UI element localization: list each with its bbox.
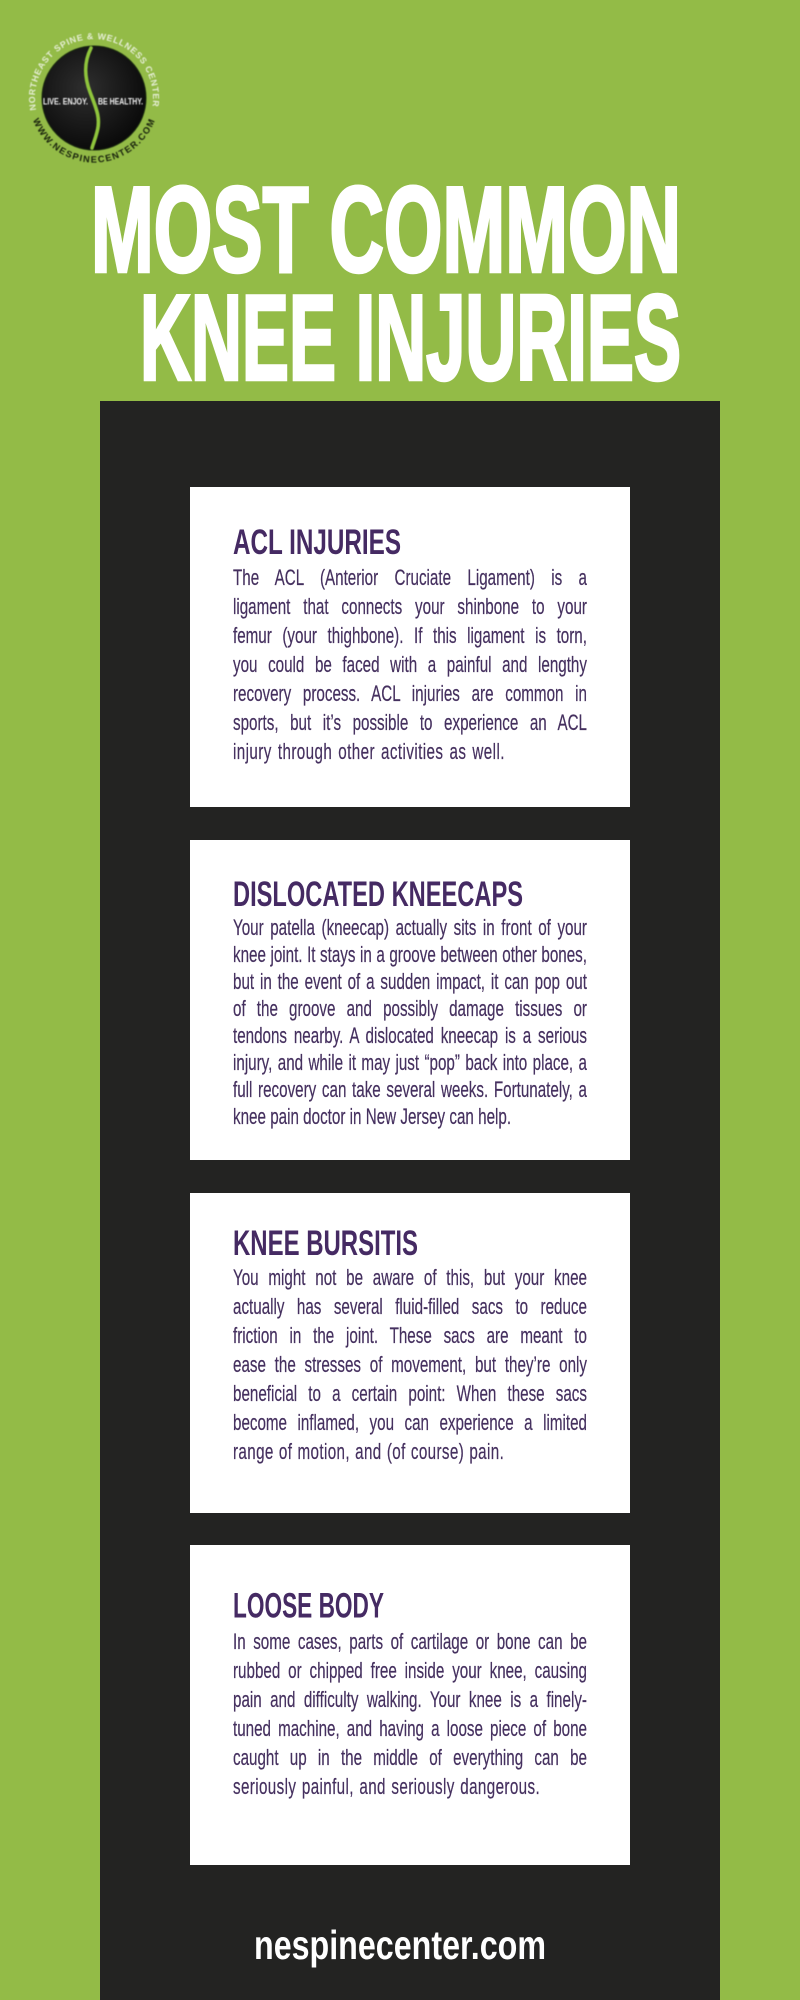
logo ring text top: NORTHEAST SPINE & WELLNESS CENTER <box>28 32 160 111</box>
text: loose body: In some cases, parts of cartilage or bone can be <box>233 1629 587 1654</box>
logo spine <box>86 48 98 148</box>
card: loose body <box>190 1545 630 1864</box>
text: loose body: rubbed or chipped free inside your knee, causing <box>233 1658 587 1683</box>
logo slogan <box>43 96 143 106</box>
text: knee bursitis: actually has several fluid-filled sacs to reduce <box>233 1294 587 1319</box>
text: knee bursitis: beneficial to a certain point: When these sacs <box>233 1381 587 1406</box>
title <box>91 162 681 400</box>
text: dislocated kneecaps: full recovery can take several weeks. Fortunately, a <box>233 1077 587 1102</box>
text: dislocated kneecaps: tendons nearby. A dislocated kneecap is a serious <box>233 1023 587 1048</box>
heading: knee bursitis: KNEE BURSITIS <box>233 1223 418 1262</box>
text: knee bursitis: friction in the joint. These sacs are meant to <box>233 1323 587 1348</box>
text: dislocated kneecaps: of the groove and possibly damage tissues or <box>233 996 587 1021</box>
heading: dislocated kneecaps: DISLOCATED KNEECAPS <box>233 875 523 914</box>
text: ACL injuries: injury through other activities as well. <box>233 739 505 764</box>
text: ACL injuries: recovery process. ACL injuries are common in <box>233 681 587 706</box>
text: knee bursitis: become inflamed, you can experience a limited <box>233 1410 587 1435</box>
heading: ACL injuries: ACL INJURIES <box>233 523 401 562</box>
text: knee bursitis: ease the stresses of movement, but they’re only <box>233 1352 587 1377</box>
card: dislocated kneecaps <box>190 840 630 1160</box>
card: ACL injuries <box>190 487 630 807</box>
text: dislocated kneecaps <box>233 915 587 1129</box>
text: knee bursitis <box>233 1265 587 1464</box>
text: loose body: tuned machine, and having a loose piece of bone <box>233 1716 587 1741</box>
text: ACL injuries: femur (your thighbone). If this ligament is torn, <box>233 623 587 648</box>
text: dislocated kneecaps: injury, and while it may just “pop” back into place, a <box>233 1050 587 1075</box>
dark panel <box>100 401 720 2000</box>
text: ACL injuries: you could be faced with a painful and lengthy <box>233 652 587 677</box>
logo <box>28 32 160 164</box>
text: ACL injuries: The ACL (Anterior Cruciate Ligament) is a <box>233 565 587 590</box>
text: loose body <box>233 1629 587 1799</box>
text: ACL injuries: sports, but it’s possible to experience an ACL <box>233 710 587 735</box>
logo slogan: LIVE. ENJOY. <box>43 96 88 106</box>
card: knee bursitis <box>190 1192 630 1512</box>
text: loose body: caught up in the middle of everything can be <box>233 1745 587 1770</box>
logo ring text bottom: WWW.NESPINECENTER.COM <box>33 117 155 164</box>
heading: loose body: LOOSE BODY <box>233 1586 384 1625</box>
logo disc <box>42 46 146 150</box>
text: loose body: seriously painful, and seriously dangerous. <box>233 1774 540 1799</box>
text: dislocated kneecaps: but in the event of a sudden impact, it can pop out <box>233 969 587 994</box>
text: dislocated kneecaps: Your patella (kneecap) actually sits in front of your <box>233 915 587 940</box>
text: knee bursitis: You might not be aware of this, but your knee <box>233 1265 587 1290</box>
text: dislocated kneecaps: knee pain doctor in New Jersey can help. <box>233 1104 511 1129</box>
text: ACL injuries <box>233 565 587 764</box>
text: ACL injuries: ligament that connects your shinbone to your <box>233 594 587 619</box>
logo slogan: BE HEALTHY. <box>98 96 143 106</box>
text: loose body: pain and difficulty walking. Your knee is a finely- <box>233 1687 587 1712</box>
text: dislocated kneecaps: knee joint. It stays in a groove between other bones, <box>233 942 587 967</box>
text: knee bursitis: range of motion, and (of course) pain. <box>233 1439 504 1464</box>
